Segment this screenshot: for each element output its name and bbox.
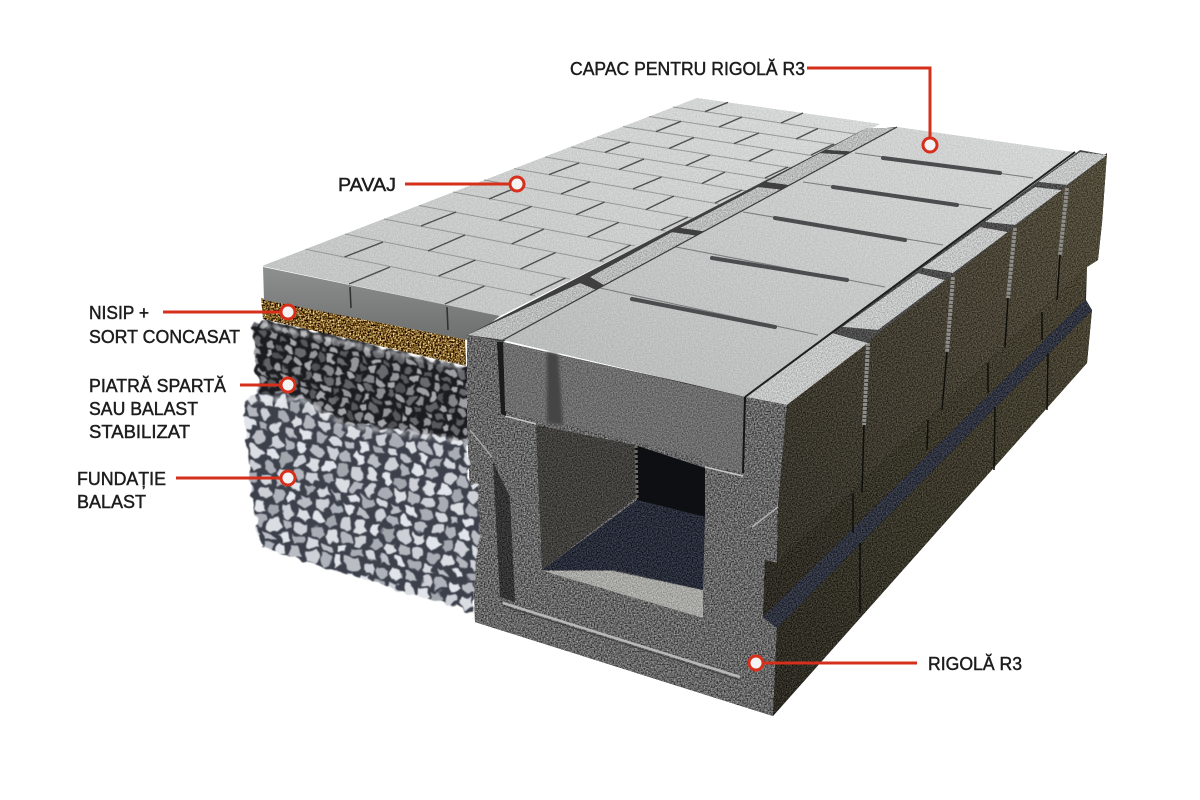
layer: crushed stone [253,320,470,445]
label: fundație balast [77,469,295,512]
paving front faces [263,267,500,340]
gutter cover front [497,342,745,473]
label: pavaj: PAVAJ [338,175,396,195]
cover dividers [600,153,1033,335]
paving joints [306,107,859,296]
paving cross joints [344,102,834,304]
gutter right side joints [853,188,1067,613]
cover slit left [497,342,506,416]
layer: sand and aggregate [261,298,466,366]
channel lit lower edge [543,571,703,618]
left lip segments [467,128,897,340]
label: capac pentru rigolă [570,59,937,152]
channel floor [542,500,705,590]
label: piatră spartă: STABILIZAT [89,422,190,442]
front face highlights [470,416,778,680]
label: rigolă r3: RIGOLĂ R3 [928,654,1022,674]
cover top surface [503,127,1073,397]
left drainage groove [493,462,515,602]
paving blocks [262,98,880,340]
label: capac pentru rigolă: CAPAC PENTRU RIGOLĂ R3 [570,59,805,79]
gutter base silhouette [467,153,1107,716]
gutter right side: middle tier [764,267,1087,617]
cover front face [503,342,745,473]
left lip base [467,127,897,342]
gutter cover plates [503,127,1075,397]
right lip base [745,150,1107,405]
label: nisip + sort concasat: NISIP + [89,303,149,323]
label: fundație balast: BALAST [77,492,146,512]
label: piatră spartă: PIATRĂ SPARTĂ [89,376,226,396]
label: piatră spartă: SAU BALAST [89,399,198,419]
gutter front face [467,335,787,716]
gutter R3 body [467,153,1107,716]
cover slit right [743,397,745,473]
label: nisip + sort concasat [89,303,295,347]
channel left wall [536,425,637,570]
gutter left lip [467,127,897,342]
label: rigolă r3 [749,654,1022,674]
stone top highlight [248,325,465,442]
cover rib shadow [547,352,563,425]
layer: foundation ballast stones [243,392,479,612]
label: nisip + sort concasat: SORT CONCASAT [89,327,240,347]
right lip segments [745,152,1107,405]
label: pavaj [338,175,524,195]
channel back [635,445,705,517]
gutter right side: upper tier [777,153,1107,563]
gutter right side: lower tier [773,310,1092,716]
paving front seams [350,287,448,330]
cover rib highlight [696,386,698,458]
label: piatră spartă [89,376,295,442]
back joint [636,445,637,498]
label: fundație balast: FUNDAȚIE [77,469,166,489]
cover edge lines [745,152,1075,397]
paving top surface [262,98,880,316]
gutter right lip [745,150,1107,405]
gutter channel opening [536,425,705,618]
cover slots [632,158,1000,327]
gutter right side: recessed band [763,300,1092,628]
